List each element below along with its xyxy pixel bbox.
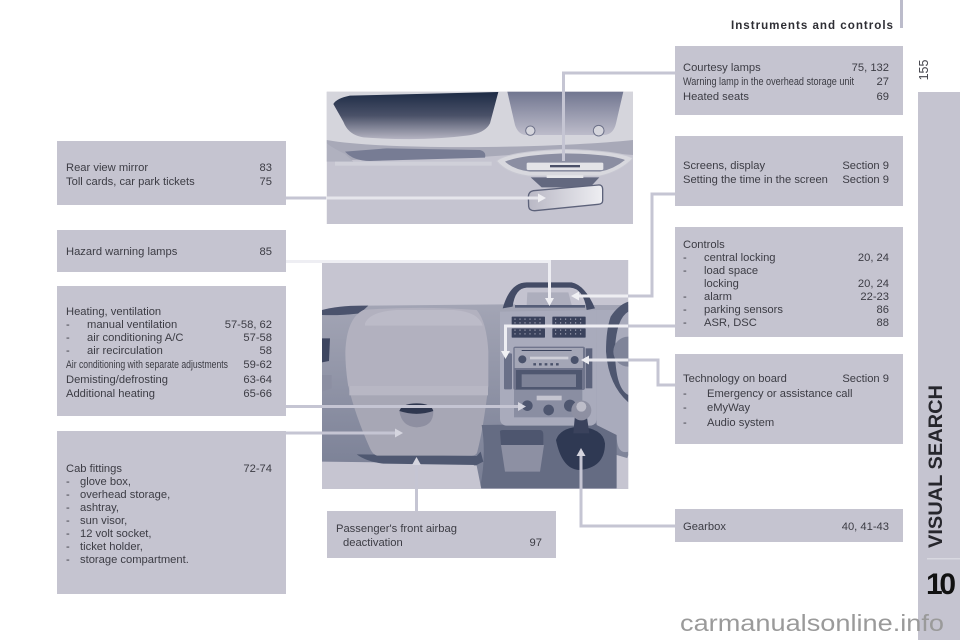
panel: passenger airbag: 97 [530,537,542,549]
panel: controls: central locking [704,252,776,264]
panel: heating and ventilation: manual ventilation [87,319,177,331]
connector: heating [286,402,526,411]
watermark: carmanualsonline.info [680,610,944,636]
panel: screens and display: Screens, display [683,160,765,172]
grab handle [503,282,595,310]
panel: cab fittings: storage compartment. [80,554,189,566]
page number: 155 [917,60,931,80]
panel: screens and display [675,136,903,206]
panel: technology on board: - [683,388,687,400]
glove box lower [348,386,488,456]
connector: hazard warning lamps [286,262,554,306]
panel: technology on board: - [683,417,687,429]
panel: cab fittings: - [66,489,70,501]
connector: technology on board [581,356,675,385]
gear lever [574,418,589,433]
panel: heating and ventilation: 57-58, 62 [225,319,272,331]
header rule [900,0,903,28]
panel: hazard warning lamps [57,230,286,272]
panel: courtesy lamps: 75, 132 [852,62,889,74]
panel: screens and display: Section 9 [842,160,889,172]
panel: cab fittings [57,431,286,594]
panel: screens and display: Setting the time in the screen [683,174,828,186]
panel: passenger airbag: Passenger's front airbag [336,523,457,535]
panel: cab fittings: - [66,554,70,566]
panel: heating and ventilation: 59-62 [243,359,272,371]
panel: technology on board: Technology on board [683,373,787,385]
panel: courtesy lamps: Warning lamp in the overhead storage unit [683,76,855,88]
panel: heating and ventilation: - [66,332,70,344]
panel: technology on board [675,354,903,444]
panel: rear view mirror: 83 [260,162,272,174]
panel: heating and ventilation [57,286,286,416]
panel: controls: - [683,252,687,264]
panel: cab fittings: 12 volt socket, [80,528,152,540]
panel: heating and ventilation: Additional heating [66,388,155,400]
panel: controls: 22-23 [860,291,889,303]
panel: controls: - [683,304,687,316]
panel: rear view mirror: 75 [260,176,272,188]
panel: cab fittings: - [66,528,70,540]
panel: courtesy lamps: 27 [877,76,889,88]
panel: controls: 86 [877,304,889,316]
panel: controls: 20, 24 [858,278,889,290]
console [500,310,597,426]
panel: heating and ventilation: 65-66 [243,388,272,400]
panel: heating and ventilation: air conditioning A/C [87,332,183,344]
page title: Instruments and controls [731,19,893,32]
panel: gearbox [675,509,903,542]
panel: heating and ventilation: Air conditioning with separate adjustments [66,359,228,371]
panel: cab fittings: sun visor, [80,515,127,527]
panel: cab fittings: - [66,476,70,488]
dash lower dark band [357,452,483,465]
panel: cab fittings: - [66,541,70,553]
connector: controls [501,326,675,359]
panel: cab fittings: 72-74 [243,463,272,475]
lower light floor [474,466,482,488]
panel: courtesy lamps: Heated seats [683,91,749,103]
panel: gearbox: 40, 41-43 [842,521,889,533]
tunnel [480,423,617,488]
panel: controls: - [683,265,687,277]
glove box upper [345,308,488,387]
connector: cab fittings [286,428,403,438]
panel: rear view mirror: Toll cards, car park tickets [66,176,195,188]
panel: rear view mirror: Rear view mirror [66,162,148,174]
panel: controls [675,227,903,337]
panel: controls: parking sensors [704,304,783,316]
connector: courtesy lamps [564,73,675,161]
panel: technology on board: Audio system [707,417,774,429]
climate controls [514,390,582,417]
panel: hazard warning lamps: 85 [260,246,272,258]
panel: passenger airbag [327,511,556,558]
panel: heating and ventilation: air recirculation [87,345,163,357]
panel: heating and ventilation: 57-58 [243,332,272,344]
panel: rear view mirror [57,141,286,205]
panel: controls: alarm [704,291,732,303]
chapter number: 10 [926,568,956,601]
panel: controls: - [683,317,687,329]
panel: technology on board: Emergency or assistance call [707,388,852,400]
panel: controls: ASR, DSC [704,317,757,329]
panel: controls: locking [704,278,739,290]
panel: cab fittings: ashtray, [80,502,119,514]
panel: passenger airbag: deactivation [343,537,403,549]
panel: controls: 88 [877,317,889,329]
panel: controls: load space [704,265,758,277]
panel: heating and ventilation: Demisting/defrosting [66,374,168,386]
connector: screens display [571,194,675,300]
panel: controls: Controls [683,239,725,251]
panel: heating and ventilation: 63-64 [243,374,272,386]
photo: dashboard and centre console [322,260,643,489]
radio [513,347,585,390]
panel: courtesy lamps [675,46,903,115]
panel: technology on board: eMyWay [707,402,751,414]
panel: heating and ventilation: 58 [260,345,272,357]
panel: cab fittings: ticket holder, [80,541,143,553]
vents [512,317,545,325]
sidebar label: VISUAL SEARCH [925,385,947,548]
connector: gearbox [576,448,675,526]
panel: technology on board: Section 9 [842,373,889,385]
sidebar: visual search tab [918,92,960,640]
panel: screens and display: Section 9 [842,174,889,186]
panel: gearbox: Gearbox [683,521,726,533]
panel: heating and ventilation: - [66,345,70,357]
panel: technology on board: - [683,402,687,414]
connector: passenger airbag [412,457,421,511]
panel: cab fittings: overhead storage, [80,489,170,501]
dashboard body [322,304,628,488]
photo: overhead console and mirror [327,92,633,224]
panel: courtesy lamps: Courtesy lamps [683,62,761,74]
panel: controls: 20, 24 [858,252,889,264]
panel: controls: - [683,291,687,303]
panel: cab fittings: glove box, [80,476,131,488]
glove box handle [400,411,434,428]
panel: cab fittings: Cab fittings [66,463,122,475]
panel: heating and ventilation: - [66,319,70,331]
steering wheel [597,310,628,452]
panel: courtesy lamps: 69 [877,91,889,103]
panel: hazard warning lamps: Hazard warning lamps [66,246,178,258]
panel: cab fittings: - [66,502,70,514]
panel: heating and ventilation: Heating, ventilation [66,306,161,318]
panel: cab fittings: - [66,515,70,527]
connector: rear view mirror [286,194,546,202]
